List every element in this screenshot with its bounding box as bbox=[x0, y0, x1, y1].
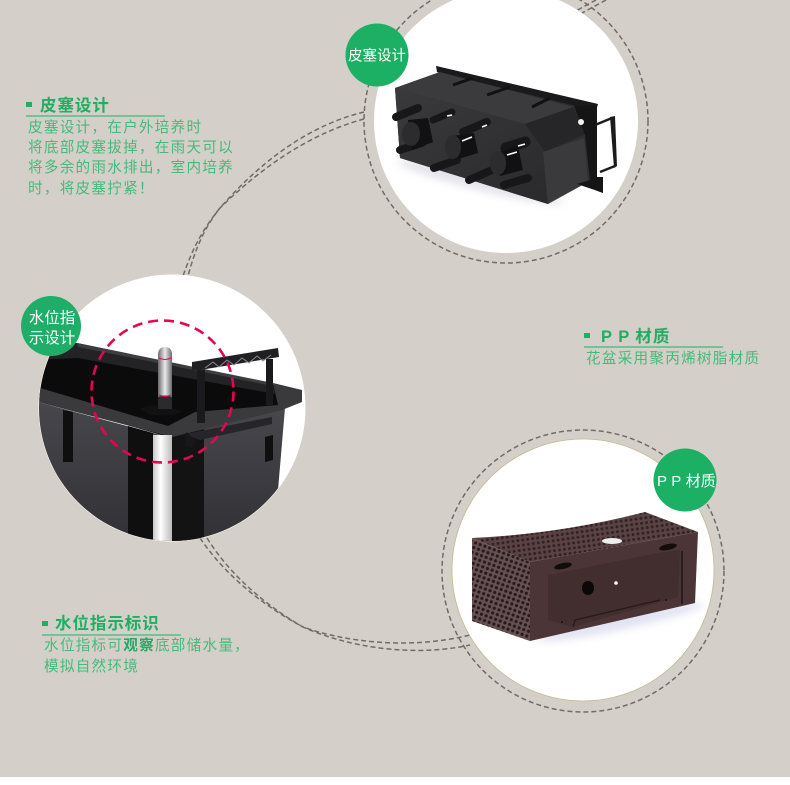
description: 将多余的雨水排出，室内培养 bbox=[28, 158, 234, 176]
dashed ring bbox=[442, 430, 724, 712]
badge: plug design bbox=[346, 24, 408, 86]
dashed connector curves bbox=[183, 0, 606, 650]
panel: water level indicator product bbox=[21, 274, 306, 545]
description: 时，将皮塞拧紧！ bbox=[28, 179, 155, 197]
badge: PP material bbox=[654, 448, 716, 512]
badge: PP material: P P 材质 bbox=[657, 473, 716, 490]
description bbox=[44, 636, 250, 675]
heading: 皮塞设计 bbox=[40, 95, 110, 115]
white disc bbox=[38, 274, 306, 542]
product: brown textured planter bbox=[472, 512, 705, 647]
heading: P P 材质 bbox=[601, 326, 670, 346]
description: 模拟自然环境 bbox=[44, 657, 139, 675]
product: planter corner with water level tube bbox=[30, 340, 302, 545]
product: planter base with plugs bbox=[395, 66, 617, 210]
text block: plug design bbox=[26, 95, 234, 197]
white disc bbox=[452, 439, 714, 701]
text block: water level marker bbox=[42, 613, 250, 675]
description bbox=[28, 118, 234, 197]
text block: PP material bbox=[584, 326, 760, 367]
description: 花盆采用聚丙烯树脂材质 bbox=[586, 350, 760, 367]
badge: water level design bbox=[21, 296, 81, 356]
description: 将底部皮塞拔掉，在雨天可以 bbox=[28, 138, 234, 156]
heading: 水位指示标识 bbox=[55, 613, 160, 633]
badge: plug design: 皮塞设计 bbox=[348, 46, 406, 64]
panel: plug design product bbox=[346, 0, 648, 263]
description: 皮塞设计，在户外培养时 bbox=[28, 118, 202, 136]
description: 水位指标可观察底部储水量， bbox=[44, 636, 250, 654]
panel: PP material product bbox=[442, 430, 724, 712]
dashed highlight ring bbox=[92, 320, 234, 462]
badge: water level design: 水位指 bbox=[29, 309, 75, 327]
dashed ring bbox=[364, 0, 648, 263]
white disc bbox=[374, 0, 638, 253]
badge: water level design: 示设计 bbox=[29, 329, 75, 347]
